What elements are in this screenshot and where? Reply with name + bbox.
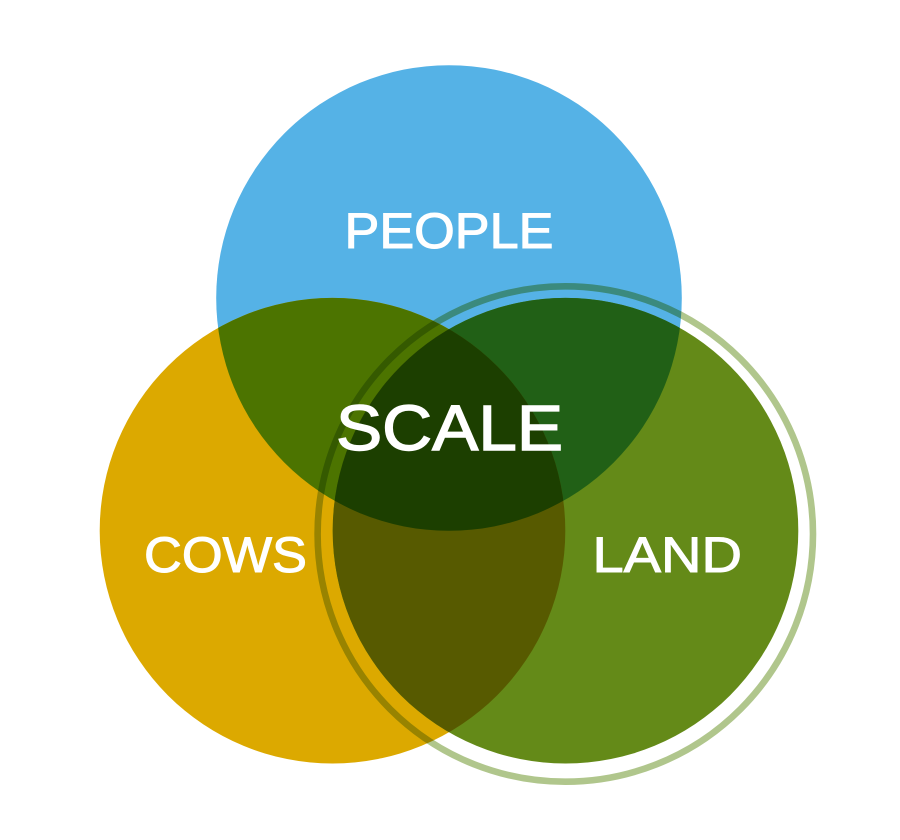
overlap: people and land [448,298,680,500]
outer ring around land [318,286,813,782]
overlap: cows and land [332,329,566,732]
overlap: people and cows [218,298,449,500]
label: people: PEOPLE [344,203,554,259]
circle: cows [100,298,565,764]
venn diagram [100,65,816,785]
label: scale: SCALE [336,392,563,464]
circle: land [333,298,798,764]
label: cows: COWS [144,527,307,583]
circle: people [216,65,682,531]
label: land: LAND [592,527,742,583]
overlap: all three [334,329,564,531]
